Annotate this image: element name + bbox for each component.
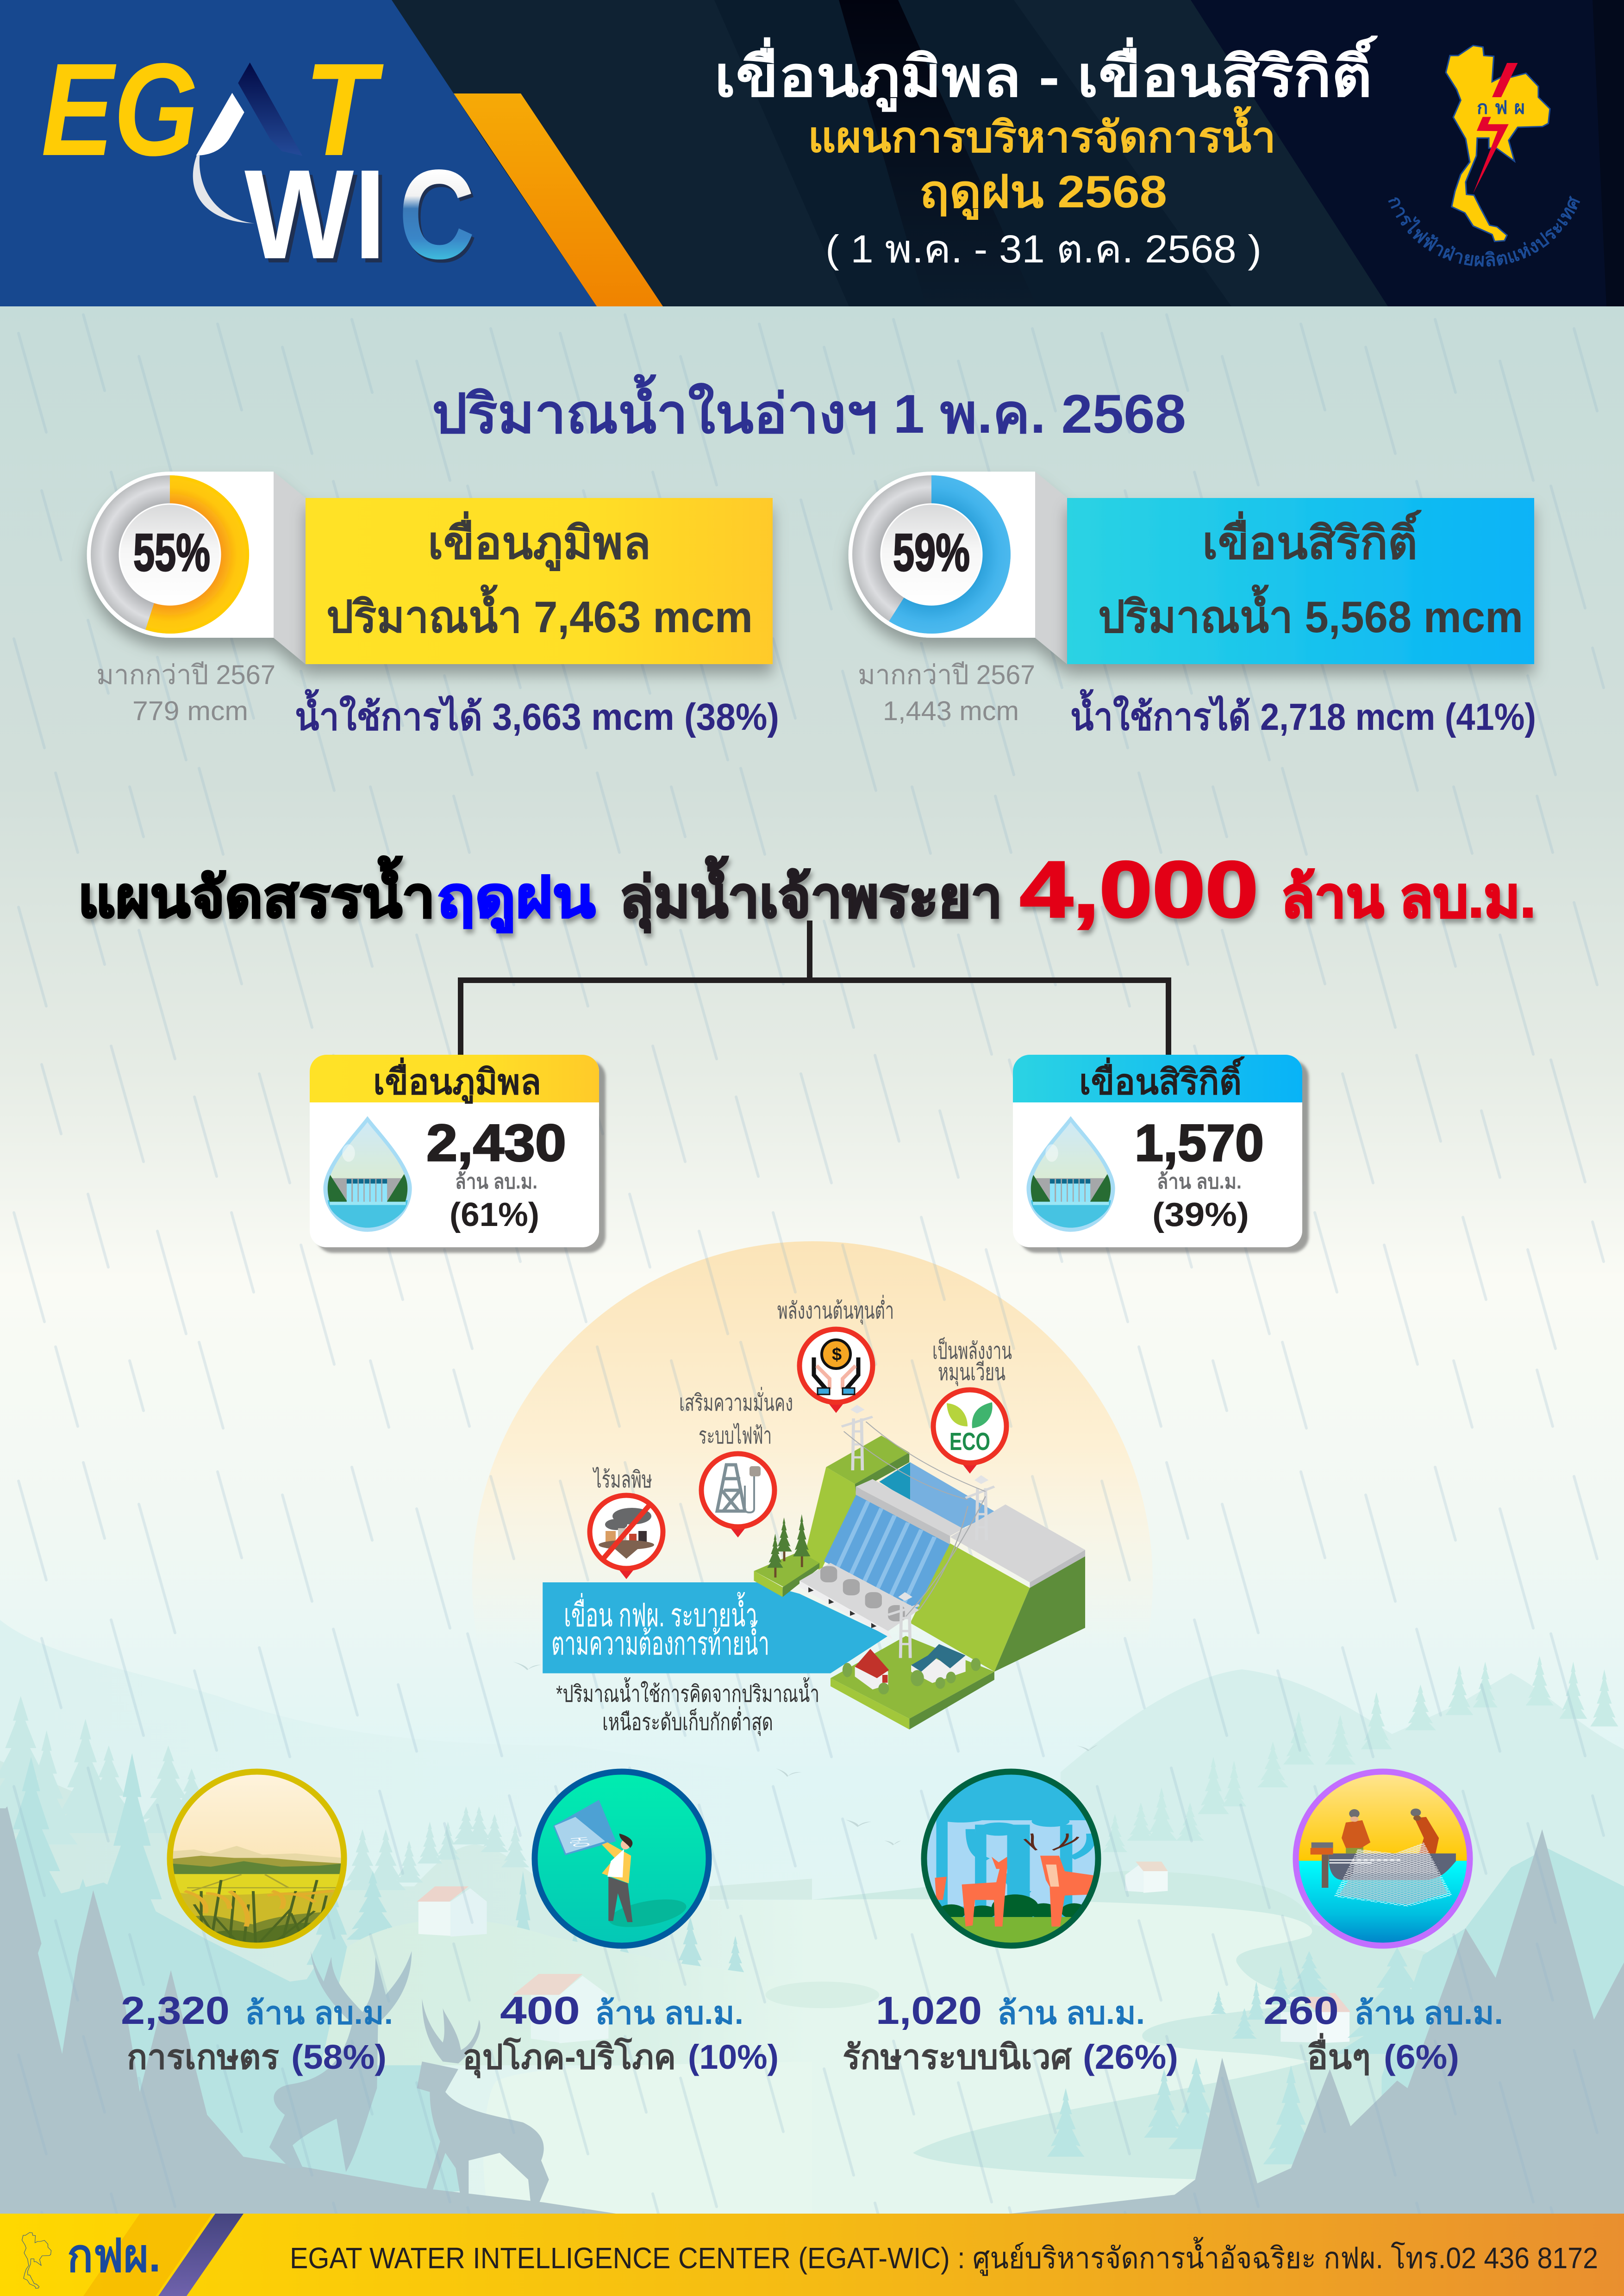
icon: water drop dam [323, 1116, 412, 1232]
heading: reservoir volume: ปริมาณน้ำในอ่างฯ 1 พ.ค. 2568 [432, 374, 1186, 445]
volume: 400 [500, 1989, 580, 2032]
icon: fishermen with net [1292, 1767, 1474, 1949]
background house near text [512, 1974, 608, 2043]
label: เสริมความมั่นคง [679, 1387, 793, 1416]
logo: EGAT WIC: T [304, 36, 384, 183]
title: เขื่อนภูมิพล - เขื่อนสิริกิติ์ [714, 35, 1378, 112]
logo: EGAT WIC: EG [41, 36, 198, 183]
EGAT emblem: กฟผ [1477, 98, 1525, 118]
background house right [1125, 1861, 1168, 1893]
heading: rainy-season allocation plan: ล้าน ลบ.ม. [1281, 866, 1536, 929]
logo: EGAT WIC: C [401, 147, 477, 289]
label: ระบบไฟฟ้า [699, 1423, 772, 1449]
share: (61%) [450, 1196, 539, 1233]
callout: renewable energy [932, 1337, 1012, 1474]
comparison with last year [858, 660, 1035, 726]
blue name box [1067, 498, 1534, 664]
label [679, 1387, 793, 1449]
allocation figure: 2,430 [426, 1114, 566, 1172]
panel: ecosystem [843, 1767, 1178, 2076]
dam name: เขื่อนสิริกิติ์ [1202, 510, 1422, 568]
label: เป็นพลังงาน [932, 1337, 1012, 1364]
unit: ล้าน ลบ.ม. [997, 1996, 1145, 2031]
icon: power pylon and plug [701, 1454, 775, 1537]
icon: coin in hands: $ [832, 1345, 842, 1364]
heading: rainy-season allocation plan: ฤดูฝน [437, 866, 595, 933]
allocation figure: 1,570 [1135, 1114, 1264, 1172]
small trees [843, 1658, 981, 1694]
panel: Sirikit reservoir [849, 472, 1536, 738]
panel: Bhumibol reservoir [87, 472, 779, 738]
blue house [911, 1644, 966, 1683]
birds [846, 1745, 1098, 1845]
icon: eco leaves: ECO [949, 1428, 990, 1456]
icon: deer in forest [921, 1767, 1105, 1951]
footnote [556, 1677, 819, 1736]
label: รักษาระบบนิเวศ [843, 2038, 1072, 2076]
comparison with last year: 779 mcm [132, 696, 248, 726]
heading: rainy-season allocation plan: แผนจัดสรรน้ำ [78, 856, 435, 929]
card: Sirikit allocation [1013, 1055, 1302, 1247]
donut gauge 59%: 59% [893, 523, 970, 582]
dam release caption: เขื่อน กฟผ. ระบายน้ำ [564, 1592, 757, 1633]
footnote: เหนือระดับเก็บกักต่ำสุด [602, 1706, 773, 1736]
logo: EGAT WIC: C [399, 143, 475, 286]
connector lines [458, 921, 1171, 1055]
panel: other uses [1263, 1767, 1503, 2076]
share: (10%) [688, 2038, 779, 2076]
header band [0, 0, 1624, 306]
background house [417, 1886, 487, 1936]
volume: 2,320 [121, 1989, 230, 2032]
heading: rainy-season allocation plan: 4,000 [1020, 845, 1258, 934]
footer logo [22, 2230, 161, 2288]
logo: EGAT WIC [41, 36, 477, 290]
label: พลังงานต้นทุนต่ำ [777, 1295, 894, 1325]
callout: low-cost energy [777, 1295, 894, 1413]
footer band [0, 2214, 1624, 2296]
dam release caption [551, 1592, 769, 1661]
heading: rainy-season allocation plan [78, 845, 1536, 934]
icon: crossed-out factory [590, 1495, 663, 1579]
pine trees [767, 1514, 810, 1578]
label: การเกษตร [127, 2038, 279, 2076]
volume: 1,020 [876, 1989, 982, 2032]
icon: person drinking water: H₂O [566, 1836, 595, 1848]
subtitle plan: แผนการบริหารจัดการน้ำ [808, 106, 1276, 161]
icon: person drinking water [530, 1767, 714, 1951]
deer silhouette rear [269, 1951, 412, 2172]
usable water: น้ำใช้การได้ 2,718 mcm (41%) [1070, 689, 1536, 738]
panel: agriculture [121, 1767, 393, 2076]
usable water: น้ำใช้การได้ 3,663 mcm (38%) [295, 689, 779, 738]
footnote: *ปริมาณน้ำใช้การคิดจากปริมาณน้ำ [556, 1677, 819, 1707]
icon: coin in hands [800, 1329, 873, 1413]
donut gauge 59% [849, 472, 1067, 664]
unit: ล้าน ลบ.ม. [1157, 1170, 1242, 1193]
label: อื่นๆ [1307, 2033, 1371, 2076]
water volume: ปริมาณน้ำ 5,568 mcm [1098, 584, 1523, 642]
heading: rainy-season allocation plan: ลุ่มน้ำเจ้าพระยา [619, 856, 1002, 933]
card title: เขื่อนสิริกิติ์ [1079, 1056, 1245, 1102]
unit: ล้าน ลบ.ม. [245, 1996, 393, 2031]
share: (58%) [291, 2038, 387, 2076]
volume: 260 [1263, 1989, 1339, 2032]
dam name: เขื่อนภูมิพล [428, 511, 651, 572]
comparison with last year: 1,443 mcm [883, 696, 1019, 726]
panel: consumption [462, 1767, 779, 2078]
water volume: ปริมาณน้ำ 7,463 mcm [326, 584, 753, 642]
transmission towers [842, 1417, 994, 1658]
callout: grid stability [679, 1387, 793, 1537]
donut gauge 55%: 55% [133, 523, 210, 582]
unit: ล้าน ลบ.ม. [595, 1996, 743, 2031]
share: (6%) [1384, 2038, 1459, 2076]
logo: EGAT WIC: WI [244, 143, 386, 286]
comparison with last year: มากกว่าปี 2567 [96, 660, 275, 690]
callout: no pollution [590, 1467, 663, 1579]
footer logo: กฟผ. [67, 2230, 161, 2282]
subtitle season: ฤดูฝน 2568 [919, 166, 1167, 220]
red house [855, 1649, 889, 1690]
label: หมุนเวียน [938, 1359, 1006, 1386]
orange diagonal band [454, 93, 663, 306]
unit: ล้าน ลบ.ม. [1354, 1996, 1503, 2031]
share: (39%) [1152, 1196, 1249, 1233]
label [932, 1337, 1012, 1386]
share: (26%) [1083, 2038, 1178, 2076]
background house behind label [1280, 1993, 1350, 2043]
card title: เขื่อนภูมิพล [373, 1057, 541, 1104]
dam illustration [543, 1405, 1085, 1730]
donut gauge 55% [87, 472, 306, 664]
comparison with last year [96, 660, 275, 726]
unit: ล้าน ลบ.ม. [455, 1170, 537, 1193]
label: อุปโภค-บริโภค [462, 2037, 676, 2078]
birds [512, 1661, 802, 1777]
comparison with last year: มากกว่าปี 2567 [858, 660, 1035, 690]
date range: ( 1 พ.ค. - 31 ต.ค. 2568 ) [825, 227, 1262, 271]
icon: rice field [168, 1767, 344, 1951]
dam release caption: ตามความต้องการท้ายน้ำ [551, 1620, 769, 1661]
icon: water drop dam [1026, 1116, 1115, 1232]
icon: eco leaves [933, 1390, 1006, 1474]
card: Bhumibol allocation [310, 1055, 599, 1247]
yellow name box [306, 498, 773, 664]
label: ไร้มลพิษ [592, 1467, 652, 1493]
deer silhouette front [417, 1999, 549, 2204]
logo: EGAT WIC: WI [248, 148, 390, 290]
